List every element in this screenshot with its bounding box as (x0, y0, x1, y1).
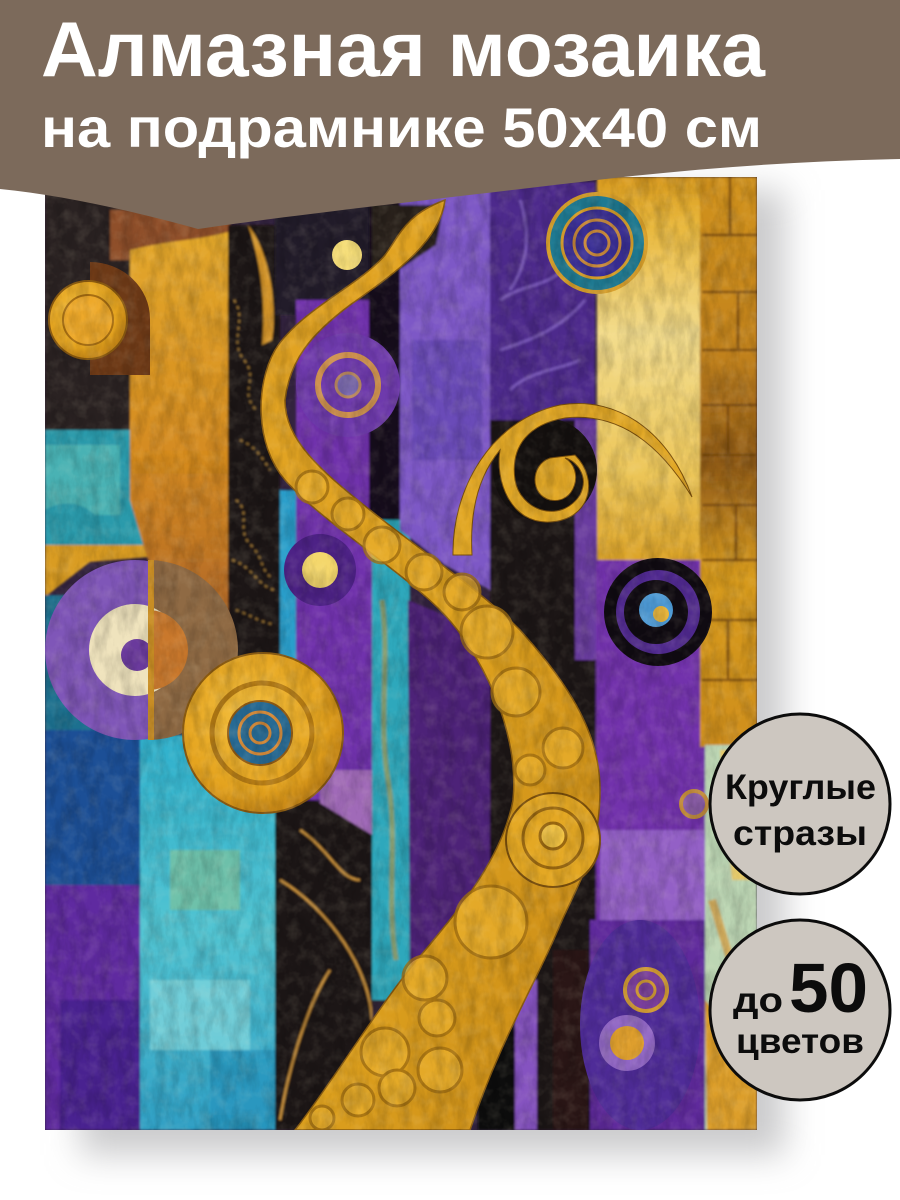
title: Алмазная мозаика (41, 5, 766, 93)
cream gold column (597, 177, 702, 572)
gold serpentine ribbon (261, 200, 600, 1130)
pale yellow dot (284, 534, 356, 606)
blue spiral disc (548, 194, 646, 292)
brick gold column (700, 177, 757, 1130)
badge: up to 50 colours (710, 920, 890, 1100)
small yellow dot (332, 240, 362, 270)
painting: abstract gold and purple artwork (45, 177, 757, 1130)
badge: up to 50 colours: 50 (789, 949, 868, 1027)
badge: up to 50 colours: до (733, 981, 783, 1020)
large ribbon medallion (506, 793, 600, 887)
left column blocks (45, 190, 230, 1130)
lower purple column (590, 560, 706, 1130)
patterned violet column (478, 182, 597, 1130)
header banner (0, 0, 900, 229)
badge: round rhinestones: Круглые (725, 768, 876, 807)
black ring disc (604, 558, 712, 666)
badge: round rhinestones (710, 714, 890, 894)
badge: round rhinestones: стразы (733, 814, 867, 853)
texture overlays (45, 177, 757, 1130)
badge: up to 50 colours: цветов (736, 1022, 864, 1061)
gold spiral arc (453, 403, 692, 555)
light purple column (372, 190, 503, 1130)
subtitle: на подрамнике 50х40 см (41, 96, 762, 159)
large gold disc (183, 653, 343, 813)
narrow teal strip (280, 490, 298, 660)
small gold spiral (681, 791, 707, 817)
black and teal strip (369, 200, 412, 1130)
second column gold and teal (130, 232, 280, 1130)
purple column (275, 205, 372, 1130)
top left gold disc (49, 262, 150, 375)
canvas shadow (80, 190, 785, 1155)
left pale disc (45, 560, 238, 740)
black lace column (228, 225, 280, 660)
lower purple disc with spirals (580, 920, 700, 1130)
purple orange disc (296, 333, 400, 437)
